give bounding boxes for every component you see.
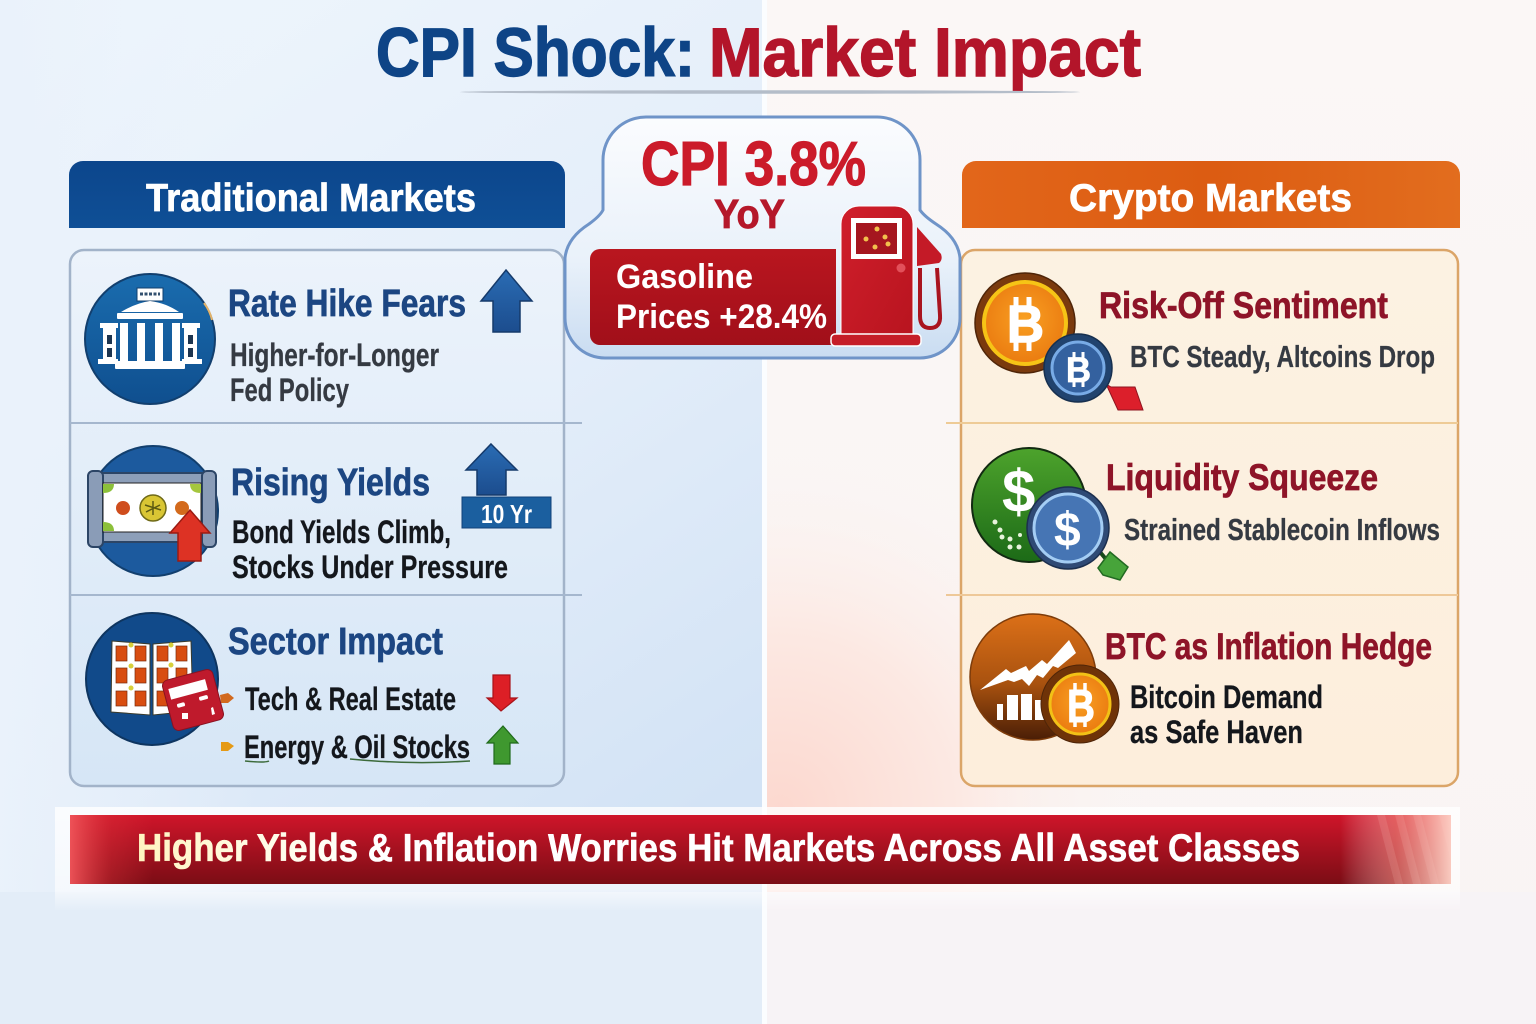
background: left blue half xyxy=(0,0,762,1024)
heading: Crypto Markets xyxy=(962,161,1460,228)
icon: up arrow blue xyxy=(481,270,532,332)
icon: dollar coins: $ xyxy=(1054,504,1081,557)
panel: CPI callout xyxy=(565,117,960,358)
icon: dollar coins: $ xyxy=(1002,458,1035,525)
heading: Traditional Markets: Traditional Markets xyxy=(146,177,476,220)
text: tech and real estate: Tech & Real Estate xyxy=(245,681,456,717)
row: liquidity squeeze xyxy=(972,448,1440,580)
panel: gasoline prices: Gasoline xyxy=(616,258,753,296)
icon: rising chart with bitcoin xyxy=(970,614,1119,743)
text: YoY: YoY xyxy=(714,191,785,237)
icon: up arrow with 10 Yr label: 10 Yr xyxy=(481,499,532,529)
row: sector impact xyxy=(86,613,518,765)
icon: up arrow with 10 Yr label xyxy=(462,444,551,529)
icon: down arrow red xyxy=(487,675,517,711)
text: CPI value: CPI 3.8% xyxy=(641,130,866,199)
heading: liquidity squeeze: Liquidity Squeeze xyxy=(1106,457,1378,498)
text: bitcoin demand: as Safe Haven xyxy=(1130,714,1303,750)
heading: risk-off sentiment: Risk-Off Sentiment xyxy=(1099,285,1388,326)
text: higher-for-longer: Higher-for-Longer xyxy=(230,337,439,373)
row: risk-off sentiment xyxy=(975,273,1435,410)
title: Market Impact xyxy=(709,14,1141,91)
heading: rate hike fears: Rate Hike Fears xyxy=(228,283,466,325)
title xyxy=(376,14,1141,91)
icon: dollar coins xyxy=(972,448,1128,580)
icon: central bank building xyxy=(85,274,215,404)
heading: Crypto Markets: Crypto Markets xyxy=(1069,177,1352,220)
heading: btc as inflation hedge: BTC as Inflation Hedge xyxy=(1105,626,1432,667)
row: btc as inflation hedge xyxy=(970,614,1432,750)
icon: fuel pump xyxy=(831,206,942,346)
icon: bitcoin coins with red flag: B xyxy=(1007,296,1044,354)
text: bond yields climb: Stocks Under Pressure xyxy=(232,549,508,585)
text: higher-for-longer xyxy=(230,337,439,408)
banner: conclusion xyxy=(55,807,1460,911)
icon: bitcoin coins with red flag xyxy=(975,273,1143,410)
title: CPI Shock: xyxy=(376,14,695,91)
icon: bitcoin coins with red flag: B xyxy=(1066,351,1091,390)
icon: bond certificate xyxy=(88,446,218,576)
icon: up arrow green xyxy=(487,726,518,764)
text: bitcoin demand: Bitcoin Demand xyxy=(1130,679,1323,715)
text: energy and oil stocks: Energy & Oil Stocks xyxy=(244,729,470,765)
text: btc steady: BTC Steady, Altcoins Drop xyxy=(1130,339,1435,374)
panel: traditional markets xyxy=(70,250,582,786)
text: higher-for-longer: Fed Policy xyxy=(230,372,349,408)
row: rate hike fears xyxy=(85,270,532,408)
icon: open book and red calculator xyxy=(86,613,234,745)
heading: rising yields: Rising Yields xyxy=(231,462,430,504)
heading: sector impact: Sector Impact xyxy=(228,621,443,663)
background: right warm half xyxy=(767,0,1536,1024)
row: rising yields xyxy=(88,444,551,585)
panel: gasoline prices: Prices +28.4% xyxy=(616,298,827,336)
text: bitcoin demand xyxy=(1130,679,1323,750)
text: strained stablecoin inflows: Strained Stablecoin Inflows xyxy=(1124,512,1440,547)
heading: Traditional Markets xyxy=(69,161,565,228)
banner: conclusion: Higher Yields & Inflation Worries Hit Markets Across All Asset Classes xyxy=(137,827,1300,870)
panel: gasoline prices xyxy=(590,249,836,345)
icon: rising chart with bitcoin: B xyxy=(1067,680,1095,732)
text: bond yields climb xyxy=(232,514,508,585)
panel: crypto markets xyxy=(946,250,1458,786)
text: bond yields climb: Bond Yields Climb, xyxy=(232,514,451,550)
bullet: energy xyxy=(221,742,234,751)
